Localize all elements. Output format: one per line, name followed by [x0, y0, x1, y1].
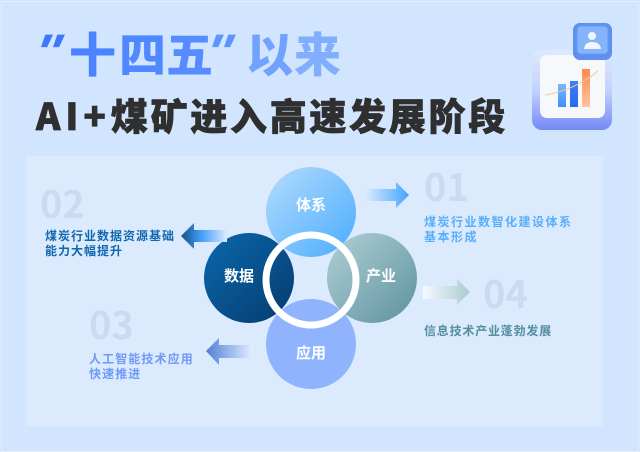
number 02: 02	[40, 174, 85, 229]
card face	[540, 55, 605, 118]
circle: 数据: 数据	[224, 265, 254, 286]
title: 十四五 以来: 来	[294, 17, 341, 86]
panel: main content	[26, 156, 603, 426]
circle: 应用: 应用	[296, 342, 326, 363]
title: 十四五 以来	[23, 17, 341, 86]
text: 01	[424, 213, 573, 245]
arrow: to 02	[181, 223, 227, 249]
text: 01: 煤炭行业数智化建设体系	[424, 213, 573, 230]
text: 04: 信息技术产业蓬勃发展	[424, 322, 552, 339]
center ring	[266, 235, 356, 325]
card base	[532, 50, 612, 130]
text: 03	[89, 350, 194, 382]
trend line	[545, 71, 598, 95]
title: 十四五 以来: 十	[69, 17, 116, 86]
title: 十四五 以来: "	[23, 24, 73, 80]
circle: 体系	[266, 167, 356, 257]
text: 02: 煤炭行业数据资源基础	[45, 227, 175, 244]
number 04: 04	[483, 264, 528, 319]
text: 02: 能力大幅提升	[45, 242, 123, 259]
circle: 产业	[327, 233, 417, 323]
title: 十四五 以来: 四	[119, 17, 166, 86]
arrow: to 01	[368, 182, 409, 208]
arrow: to 04	[423, 279, 470, 305]
user badge	[573, 23, 612, 60]
title: 十四五 以来: "	[194, 24, 244, 80]
text: 03: 人工智能技术应用	[89, 350, 194, 367]
text: 01: 基本形成	[424, 228, 478, 245]
title: AI+煤矿进入高速发展阶段: AI+煤矿进入高速发展阶段	[36, 87, 508, 141]
venn diagram	[204, 167, 417, 389]
arrow: to 03	[206, 338, 248, 365]
text: 02	[45, 227, 175, 259]
bar chart	[558, 69, 590, 107]
text: 03: 快速推进	[89, 365, 141, 382]
icon: report card with bar chart and user badge	[532, 23, 612, 130]
number 03: 03	[89, 295, 134, 350]
circle: 应用	[266, 299, 356, 389]
number 01: 01	[424, 157, 469, 212]
circle: 数据	[204, 233, 294, 323]
title: 十四五 以来: 五	[166, 17, 213, 86]
circle: 产业: 产业	[366, 265, 396, 286]
title: 十四五 以来: 以	[246, 17, 293, 86]
circle: 体系: 体系	[296, 194, 326, 215]
